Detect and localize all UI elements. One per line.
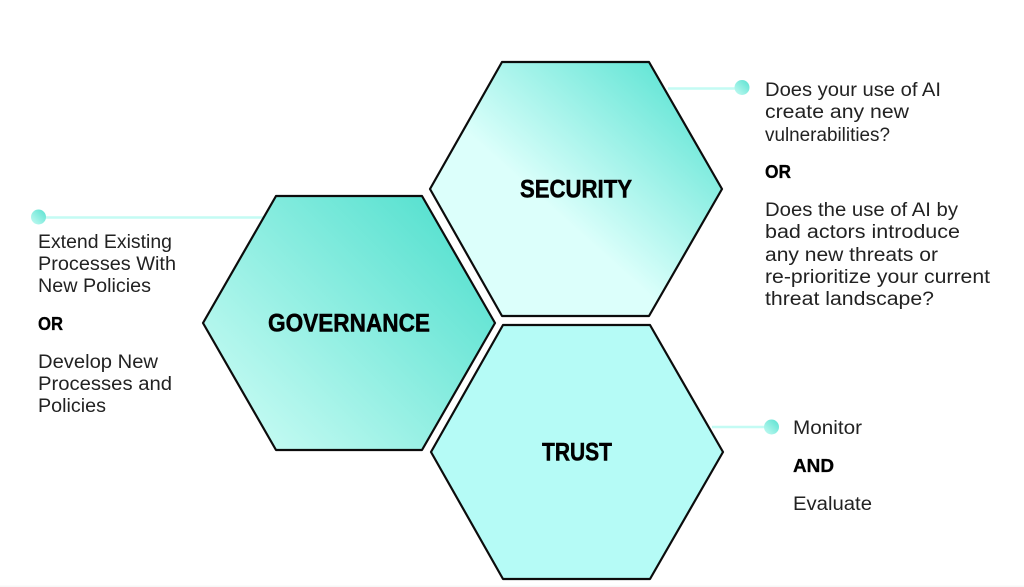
- text block: security questions: OR: [765, 161, 791, 182]
- text block: security questions: re-prioritize your current: [765, 267, 991, 288]
- text block: governance options: [38, 232, 176, 417]
- text block: security questions: any new threats or: [765, 245, 939, 266]
- connector: security: [668, 87, 740, 90]
- text block: trust actions: [793, 418, 872, 515]
- text block: security questions: [765, 80, 991, 310]
- connector: trust: [712, 426, 770, 428]
- text block: security questions: Does the use of AI by: [765, 200, 959, 221]
- text block: governance options: New Policies: [38, 276, 151, 297]
- text block: trust actions: Monitor: [793, 418, 863, 439]
- hexagon: security: [430, 62, 722, 316]
- text block: trust actions: AND: [793, 455, 834, 476]
- text block: governance options: Extend Existing: [38, 232, 172, 253]
- text block: governance options: Processes With: [38, 254, 176, 275]
- text block: security questions: bad actors introduce: [765, 222, 960, 243]
- text block: governance options: OR: [38, 313, 63, 334]
- hexagon: security: SECURITY: [520, 176, 632, 204]
- connector: governance: [40, 216, 265, 219]
- hexagon: governance: [203, 196, 495, 450]
- text block: security questions: Does your use of AI: [765, 80, 941, 101]
- dot: governance: [31, 210, 46, 224]
- hexagon: trust: TRUST: [542, 438, 612, 466]
- text block: governance options: Processes and: [38, 374, 172, 395]
- text block: security questions: threat landscape?: [765, 289, 934, 310]
- dot: security: [734, 80, 750, 95]
- text block: trust actions: Evaluate: [793, 494, 872, 515]
- text block: governance options: Develop New: [38, 352, 158, 373]
- hexagon: trust: [431, 325, 723, 579]
- dot: trust: [764, 420, 779, 434]
- text block: security questions: create any new: [765, 102, 909, 123]
- text block: governance options: Policies: [38, 396, 106, 417]
- hexagon: governance: GOVERNANCE: [268, 310, 430, 338]
- text block: security questions: vulnerabilities?: [765, 125, 890, 146]
